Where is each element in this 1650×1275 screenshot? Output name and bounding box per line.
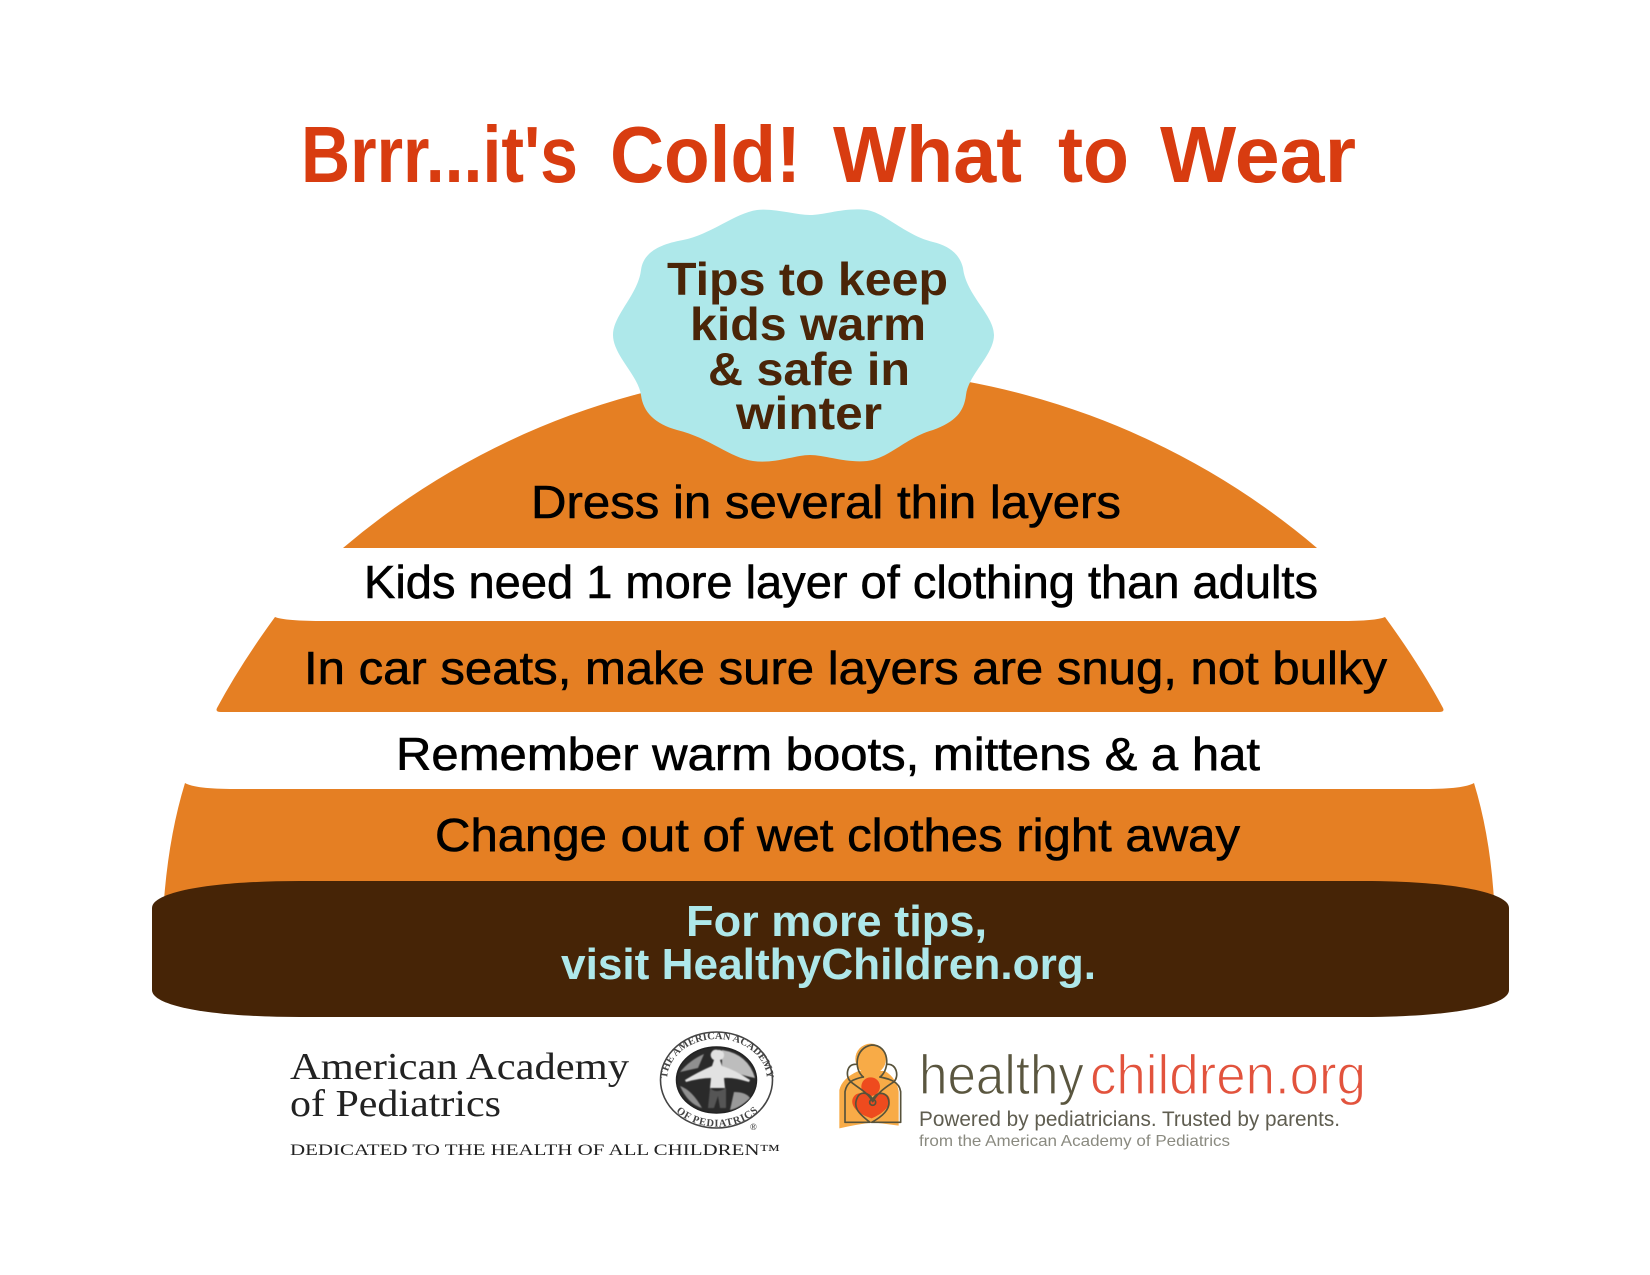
- base band: more tips: visit HealthyChildren.org.: [561, 940, 1096, 989]
- logo: American Academy of Pediatrics: [290, 1031, 780, 1159]
- icon: academy seal: THE AMERICAN ACADEMY: [661, 1032, 774, 1078]
- title: Brrr...it's: [301, 110, 578, 199]
- title: [301, 110, 1356, 199]
- logo wordmark: [919, 1043, 1366, 1150]
- base band: more tips: [152, 881, 1509, 1017]
- logo wordmark: children.org: [1090, 1043, 1366, 1106]
- logo: healthychildren.org: [839, 1043, 1366, 1150]
- logo wordmark: from the American Academy of Pediatrics: [919, 1133, 1230, 1150]
- title: Cold!: [610, 110, 801, 199]
- pyramid tier 3: wet clothes: [164, 783, 1494, 900]
- icon: parent holding child: [839, 1044, 901, 1128]
- icon: academy seal: ®: [750, 1122, 757, 1132]
- white tier text: boots mittens hat: Remember warm boots, mittens & a hat: [396, 728, 1260, 780]
- badge: tips to keep kids warm: Tips to keep: [667, 253, 948, 305]
- icon: academy seal: [660, 1031, 774, 1132]
- base band: more tips: For more tips,: [686, 897, 987, 946]
- logo wordmark: [290, 1046, 780, 1159]
- logo wordmark: Powered by pediatricians. Trusted by parents.: [919, 1108, 1340, 1131]
- logo wordmark: healthy: [919, 1043, 1084, 1106]
- pyramid tier 1: dome with first tip: Dress in several thin layers: [531, 476, 1121, 528]
- pyramid tier 2: car seats: In car seats, make sure layers are snug, not bulky: [304, 642, 1387, 694]
- title: to: [1058, 110, 1129, 199]
- logo wordmark: American Academy: [290, 1046, 629, 1088]
- logo wordmark: DEDICATED TO THE HEALTH OF ALL CHILDREN™: [290, 1142, 780, 1159]
- logo wordmark: of Pediatrics: [290, 1083, 501, 1125]
- pyramid tier 2: car seats: [216, 617, 1444, 712]
- icon: academy seal: OF PEDIATRICS: [678, 1106, 757, 1127]
- badge: tips to keep kids warm: winter: [735, 387, 882, 439]
- white tier text: one more layer: Kids need 1 more layer of clothing than adults: [364, 556, 1318, 608]
- title: Wear: [1160, 110, 1356, 199]
- badge: tips to keep kids warm: [613, 209, 994, 462]
- pyramid tier 3: wet clothes: Change out of wet clothes right away: [435, 809, 1240, 861]
- badge: tips to keep kids warm: & safe in: [708, 343, 910, 395]
- pyramid tier 1: dome with first tip: [343, 369, 1317, 548]
- badge: tips to keep kids warm: kids warm: [690, 298, 926, 350]
- title: What: [833, 110, 1022, 199]
